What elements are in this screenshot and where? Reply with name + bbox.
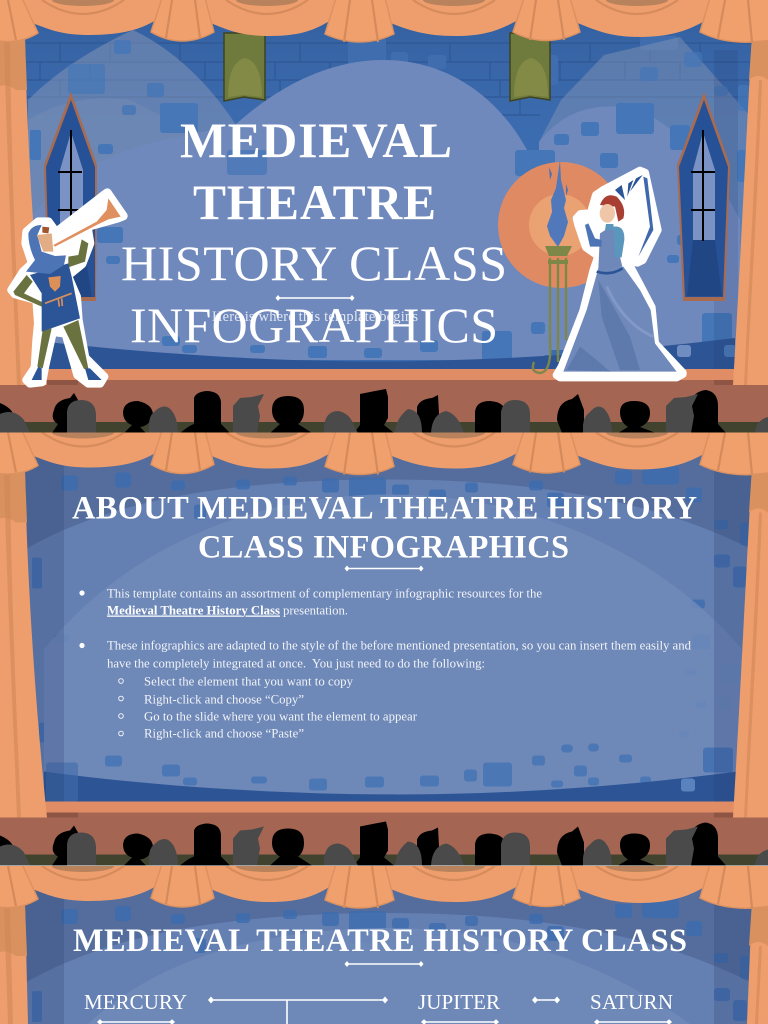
icon: left banner [224,33,265,101]
label dividers [98,1020,671,1024]
heading: MEDIEVAL THEATRE HISTORY CLASS [73,923,687,959]
connector lines [208,996,560,1024]
divider [344,961,424,967]
icon: right gothic window [677,92,730,301]
title [121,113,507,353]
curtains, stage and audience [0,0,768,433]
bullet list: Go to the slide where you want the element to appear [144,710,418,724]
bullet list: These infographics are adapted to the style of the before mentioned presentation, so you can insert them easily and [107,638,692,652]
icon: left gothic window [44,92,97,301]
title: MEDIEVAL [180,113,452,168]
icon: torch with blue flame [498,161,608,374]
bullet list: Select the element that you want to copy [144,674,354,688]
bullet list: Right-click and choose “Paste” [144,726,304,740]
stage backdrop [25,454,752,802]
heading: ABOUT MEDIEVAL THEATRE HISTORY [72,490,697,526]
stage backdrop [25,21,752,369]
bullet list: Right-click and choose “Copy” [144,692,304,706]
bullet list: This template contains an assortment of complementary infographic resources for the [107,586,542,600]
bullet list [79,586,692,740]
curtains, stage and audience [0,426,768,866]
label: Mercury: MERCURY [84,990,187,1014]
panel: slide 1 title stage [0,0,768,433]
icon: trumpeter figure [12,193,123,383]
bullet list: have the completely integrated at once. You just need to do the following: [107,656,485,670]
icon: lady in gown and hennin [557,171,683,377]
title: HISTORY CLASS [121,235,507,291]
heading [72,497,696,558]
divider [276,295,354,301]
spotlight beams [28,30,236,216]
curtains [0,860,768,1024]
heading: CLASS INFOGRAPHICS [198,530,569,566]
bullet list: Medieval Theatre History Class [107,604,280,618]
bullet list: presentation. [283,604,348,618]
label: Saturn: SATURN [590,990,673,1014]
panel: slide 3 diagram [0,860,768,1024]
title: THEATRE [193,175,436,230]
stage backdrop [0,866,768,1024]
icon: right banner [510,33,550,101]
label: Jupiter: JUPITER [418,990,500,1014]
divider [344,566,424,572]
subtitle: Here is where this template begins [212,309,418,325]
panel: slide 2 about [0,426,768,866]
title: INFOGRAPHICS [130,297,498,353]
